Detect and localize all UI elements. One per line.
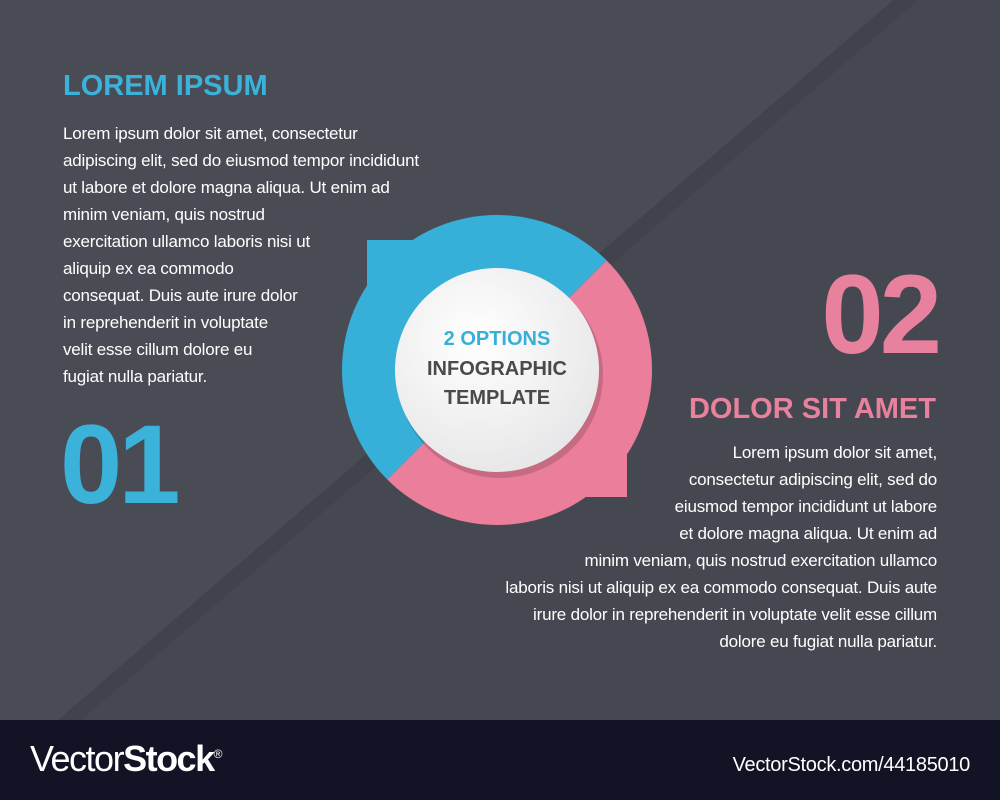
center white circle: 2 OPTIONS (444, 328, 550, 350)
footer bar (0, 720, 1000, 800)
text block right: irure dolor in reprehenderit in voluptate velit esse cillum (533, 605, 937, 624)
text block left: minim veniam, quis nostrud (63, 205, 265, 224)
text block right: eiusmod tempor incididunt ut labore (675, 497, 937, 516)
text block left: ut labore et dolore magna aliqua. Ut enim ad (63, 178, 390, 197)
text block right: consectetur adipiscing elit, sed do (689, 470, 937, 489)
heading: dolor sit amet: DOLOR SIT AMET (689, 393, 936, 425)
footer url: VectorStock.com/44185010 (733, 754, 970, 776)
number 02: 02 (821, 252, 938, 377)
text block left: velit esse cillum dolore eu (63, 340, 252, 359)
text block right: dolore eu fugiat nulla pariatur. (719, 632, 937, 651)
text block right: et dolore magna aliqua. Ut enim ad (679, 524, 937, 543)
center white circle (395, 268, 603, 478)
footer logo: VectorStock® (30, 738, 221, 779)
text block left (63, 124, 419, 386)
pink arrow segment (388, 260, 652, 525)
text block left: adipiscing elit, sed do eiusmod tempor incididunt (63, 151, 419, 170)
blue arrow segment (342, 215, 606, 480)
text block right: minim veniam, quis nostrud exercitation ullamco (585, 551, 937, 570)
text block left: in reprehenderit in voluptate (63, 313, 268, 332)
text block left: aliquip ex ea commodo (63, 259, 234, 278)
center white circle: TEMPLATE (444, 387, 550, 409)
text block left: exercitation ullamco laboris nisi ut (63, 232, 310, 251)
center white circle: INFOGRAPHIC (427, 358, 567, 380)
number 01: 01 (60, 402, 177, 527)
circular diagram (342, 215, 652, 525)
text block left: fugiat nulla pariatur. (63, 367, 207, 386)
text block right: laboris nisi ut aliquip ex ea commodo consequat. Duis aute (505, 578, 937, 597)
text block right: Lorem ipsum dolor sit amet, (733, 443, 937, 462)
text block left: Lorem ipsum dolor sit amet, consectetur (63, 124, 358, 143)
text block right (505, 443, 937, 651)
text block left: consequat. Duis aute irure dolor (63, 286, 298, 305)
heading: lorem ipsum: LOREM IPSUM (63, 70, 268, 102)
